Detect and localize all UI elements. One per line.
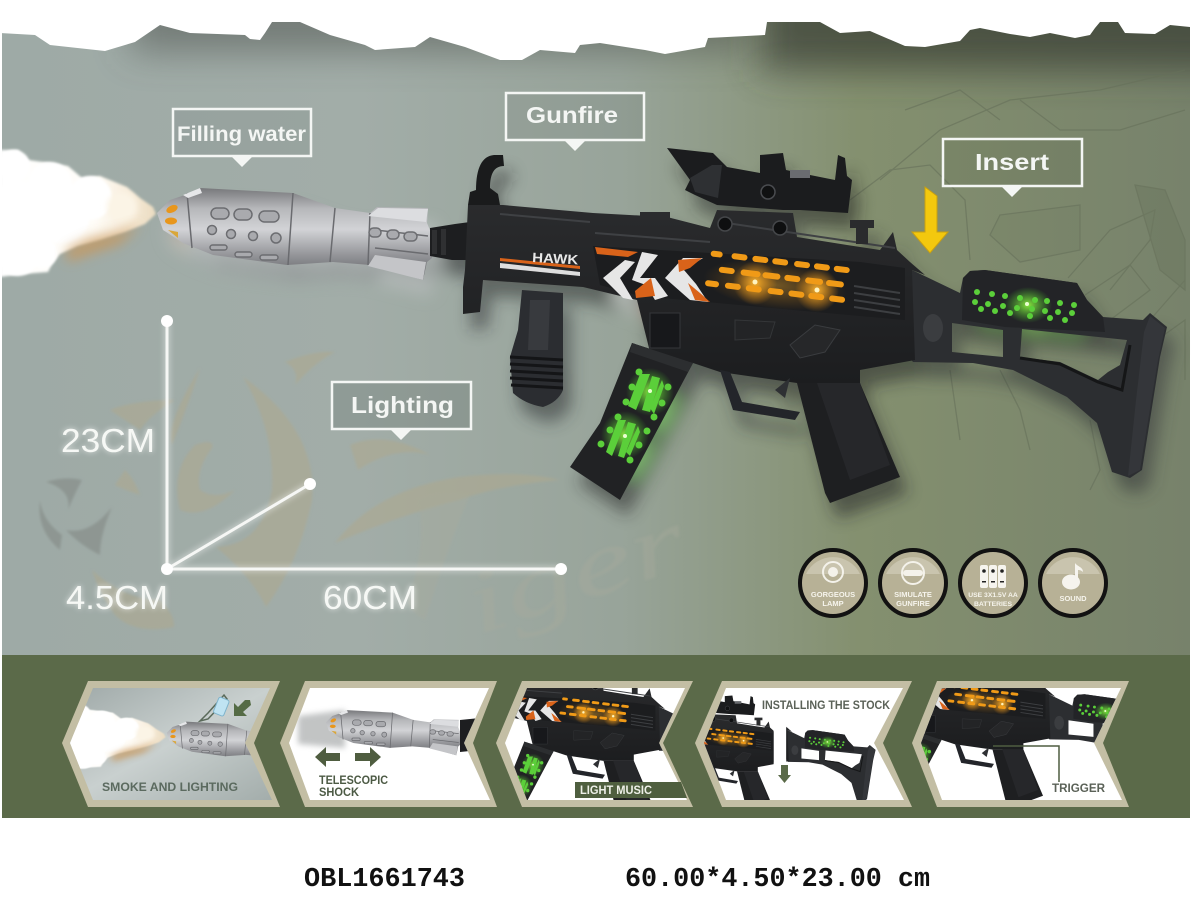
callout: lighting: Lighting — [351, 392, 454, 418]
badge: sound — [1040, 550, 1106, 616]
claw strokes — [39, 478, 112, 555]
icon: telescopic arrows — [315, 747, 381, 767]
callout: insert — [943, 139, 1082, 197]
step panel: light and music — [496, 681, 693, 807]
icon: water bottle — [200, 695, 251, 721]
callout: gunfire — [506, 93, 644, 151]
step panel: smoke and lighting — [62, 681, 290, 807]
callout: filling water — [173, 109, 311, 167]
step panel: trigger: TRIGGER — [1052, 781, 1105, 795]
step panel: light and music: LIGHT MUSIC — [580, 785, 652, 797]
smoke from rocket — [0, 150, 156, 277]
mech line-art watermark — [850, 70, 1185, 490]
step panel: smoke and lighting: SMOKE AND LIGHTING — [102, 780, 238, 794]
faded script lettering — [408, 490, 699, 654]
step panel: installing the stock — [695, 681, 912, 807]
HAWK marking — [500, 250, 580, 276]
badge: simulate gunfire: SIMULATE — [894, 590, 932, 599]
callout: insert: Insert — [975, 149, 1049, 175]
badge: batteries: USE 3X1.5V AA — [968, 592, 1018, 599]
height label: 23CM — [61, 422, 155, 459]
badge: batteries: BATTERIES — [974, 601, 1012, 608]
length label: 60CM — [323, 579, 417, 616]
tiger watermark — [39, 352, 699, 654]
arrow: install down — [778, 765, 791, 783]
callout: gunfire: Gunfire — [526, 102, 618, 128]
torn paper top edge — [0, 0, 1200, 60]
arrow: insert stock — [912, 187, 948, 253]
background panel — [2, 22, 1190, 655]
badge: gorgeous lamp: GORGEOUS — [811, 590, 855, 599]
step panel: trigger — [912, 681, 1129, 807]
callout: lighting — [332, 382, 471, 440]
trigger pointer — [993, 746, 1059, 782]
step panel: telescopic shock: TELESCOPIC — [319, 775, 388, 787]
product code: OBL1661743 — [304, 865, 465, 895]
feature badges — [800, 550, 1106, 616]
rocket launcher attachment — [157, 188, 432, 280]
toy gun — [430, 148, 1167, 503]
step panel: telescopic shock: SHOCK — [319, 787, 360, 799]
badge: simulate gunfire — [880, 550, 946, 616]
badge: simulate gunfire: GUNFIRE — [896, 599, 930, 608]
dimension diagram — [61, 315, 567, 616]
product dimensions: 60.00*4.50*23.00 cm — [625, 865, 930, 895]
bottom feature band — [2, 655, 1190, 818]
badge: gorgeous lamp — [800, 550, 866, 616]
gun shadow — [165, 164, 1175, 519]
step panel: installing the stock: INSTALLING THE STOCK — [762, 700, 891, 712]
faded script lettering: iger — [453, 490, 699, 654]
step panel: telescopic shock — [280, 681, 497, 807]
light and music label bar — [575, 782, 687, 798]
badge: gorgeous lamp: LAMP — [822, 599, 844, 608]
badge: batteries — [960, 550, 1026, 616]
depth label: 4.5CM — [66, 579, 168, 616]
callout: filling water: Filling water — [177, 123, 306, 146]
HAWK marking: HAWK — [532, 250, 579, 267]
badge: sound: SOUND — [1059, 594, 1087, 603]
